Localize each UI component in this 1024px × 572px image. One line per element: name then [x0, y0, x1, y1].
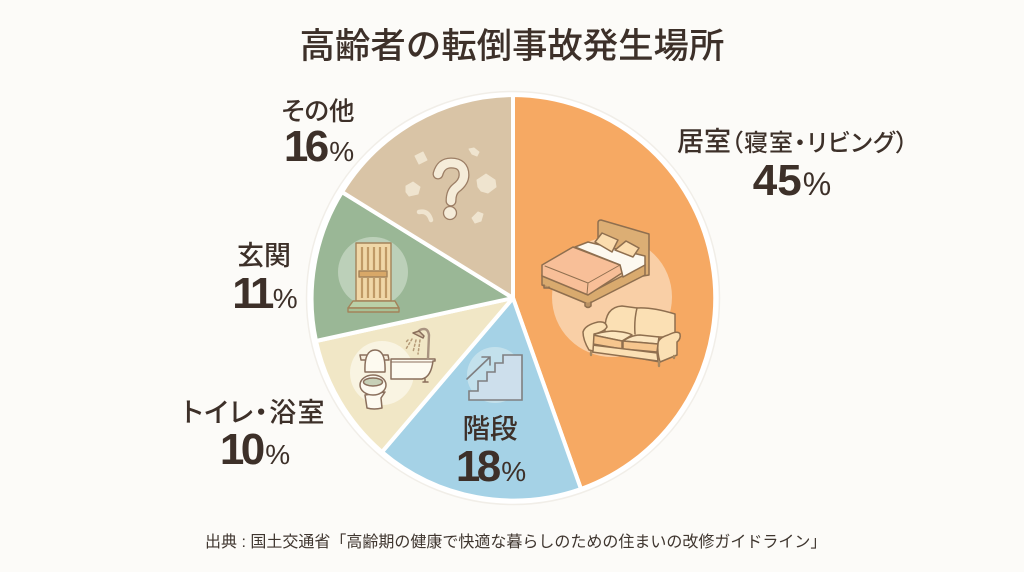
slice: 階段 18% — [382, 298, 581, 500]
label: 居室: 居室（寝室・リビング） — [677, 127, 909, 157]
title: 高齢者の転倒事故発生場所 — [300, 26, 724, 66]
value: 45%: 45% — [753, 156, 831, 205]
slice: トイレ・浴室 10% — [316, 298, 513, 452]
label: 階段: 階段 — [462, 413, 518, 444]
value: 18%: 18% — [456, 442, 526, 491]
slice: その他 16% — [342, 95, 513, 298]
icon: question mark — [406, 148, 496, 223]
value: 11%: 11% — [232, 269, 298, 318]
source note: 出典 : 国土交通省「高齢期の健康で快適な暮らしのための住まいの改修ガイドライン」 — [205, 534, 826, 551]
value: 10%: 10% — [220, 425, 290, 474]
icon: bed and sofa — [542, 220, 680, 366]
label: トイレ・浴室: トイレ・浴室 — [182, 398, 326, 428]
label: 玄関: 玄関 — [237, 241, 291, 271]
slice: 玄関 11% — [312, 192, 513, 341]
slice: 居室 45% — [513, 95, 715, 489]
icon: door — [338, 237, 408, 312]
value: 16%: 16% — [284, 122, 354, 171]
icon: stairs — [467, 347, 523, 403]
label: その他: その他 — [281, 98, 355, 126]
icon: toilet and bathtub — [350, 329, 435, 409]
